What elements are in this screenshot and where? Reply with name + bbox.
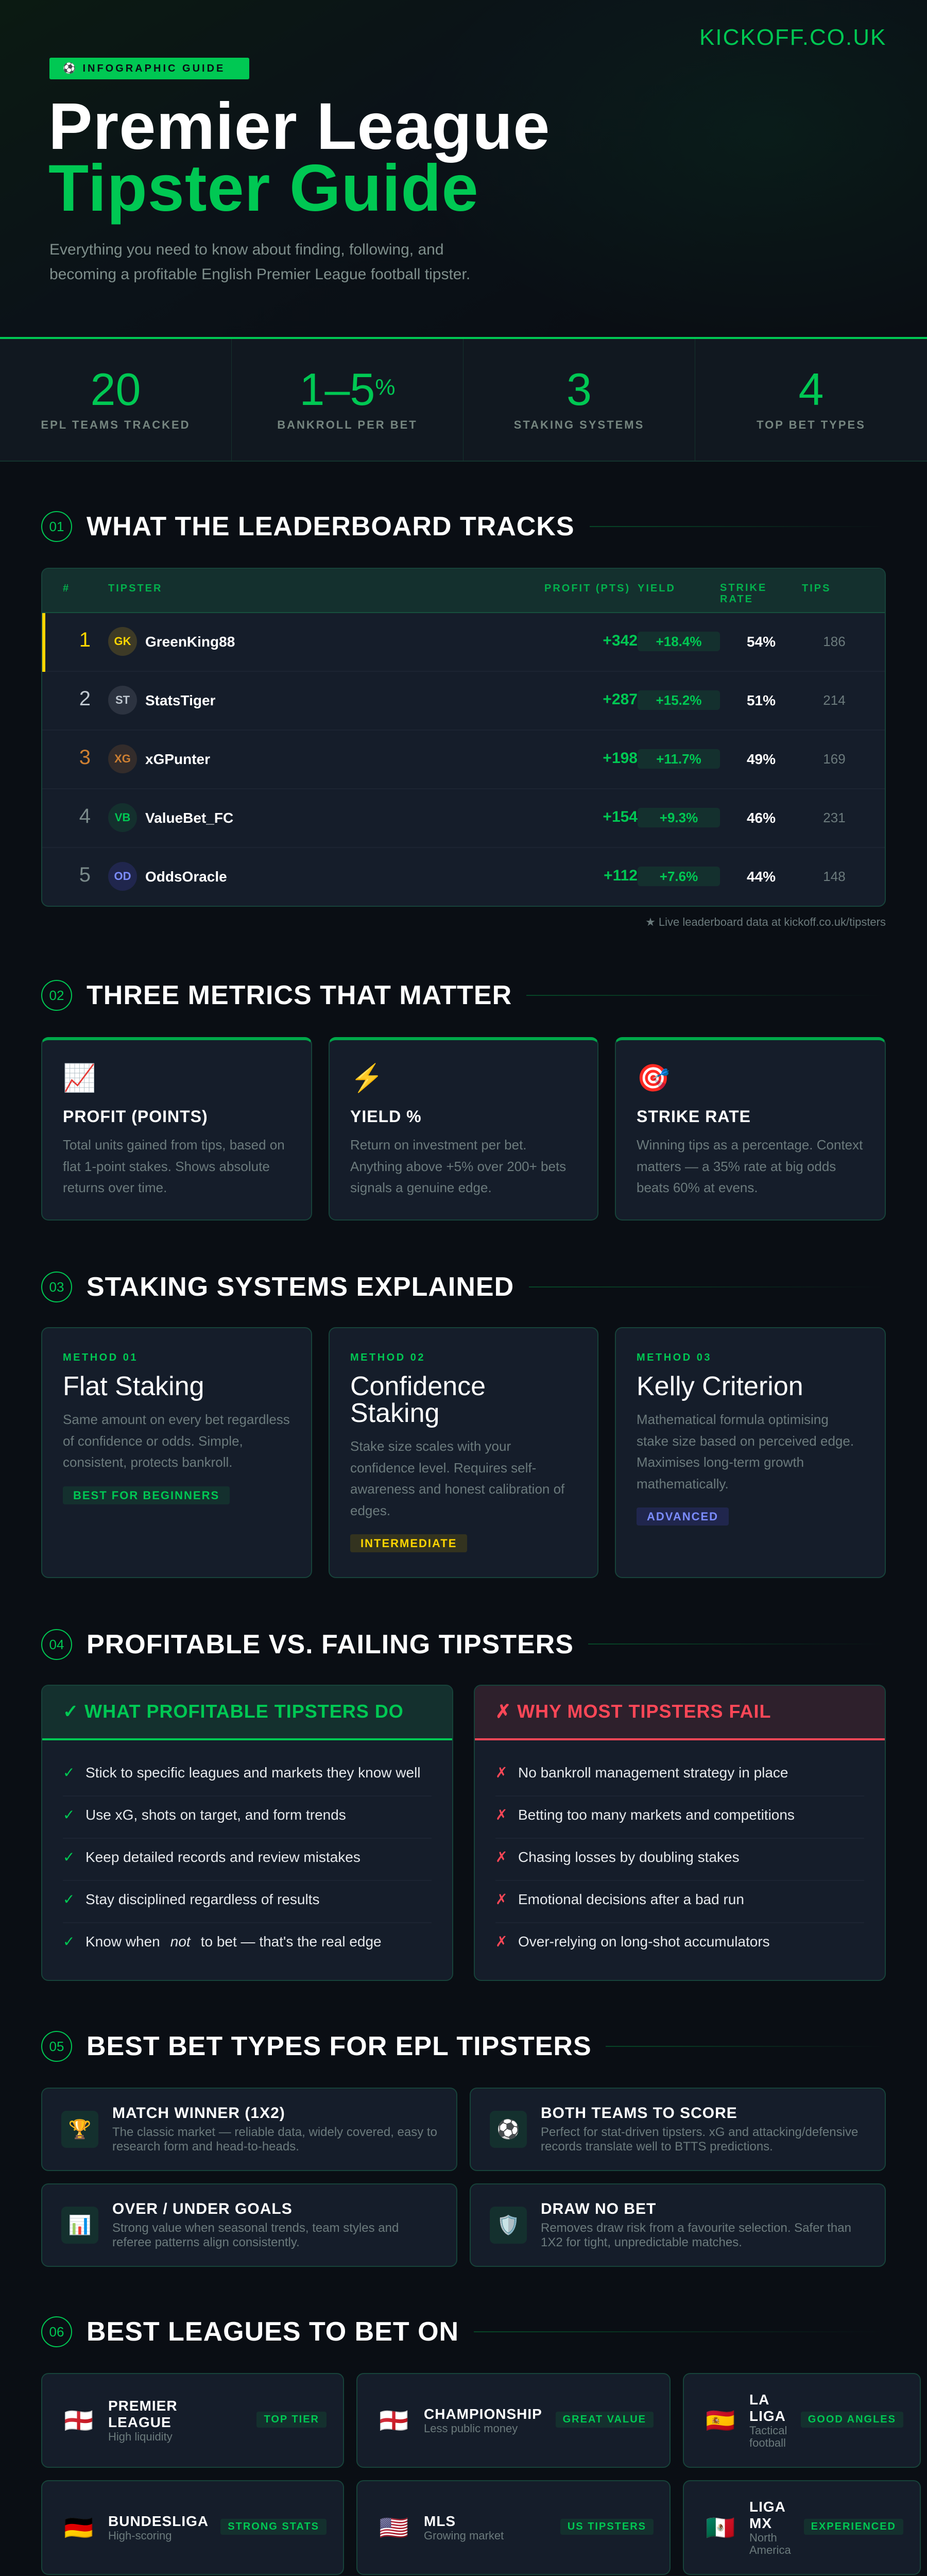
panel heading (42, 1686, 452, 1740)
table header: YIELD (638, 583, 676, 594)
league: premier league: PREMIER (108, 2398, 178, 2414)
item: ✗ (495, 1807, 507, 1823)
item (495, 1881, 864, 1923)
league: la liga: LIGA (749, 2408, 786, 2424)
bet text (541, 2221, 851, 2249)
bet: match winner (41, 2088, 457, 2171)
bet title: BOTH TEAMS TO SCORE (541, 2105, 737, 2122)
bet title: DRAW NO BET (541, 2200, 656, 2217)
stat: staking (464, 339, 695, 461)
row 2: StatsTiger (145, 692, 215, 708)
item (495, 1797, 864, 1839)
metric: profit (41, 1037, 312, 1221)
icon: shield (490, 2207, 527, 2244)
section 02 number: 02 (49, 988, 64, 1003)
item (495, 1839, 864, 1881)
metric text: signals a genuine edge. (350, 1180, 492, 1195)
item: Keep detailed records and review mistakes (85, 1849, 360, 1865)
league: premier league (41, 2373, 344, 2468)
item (63, 1797, 432, 1839)
league: bundesliga (41, 2480, 344, 2575)
section 01 heading: WHAT THE LEADERBOARD TRACKS (87, 512, 575, 541)
stat: bankroll: BANKROLL PER BET (277, 418, 418, 431)
stat: bankroll: 1–5% (300, 364, 395, 415)
row 5 (79, 862, 846, 891)
row 3: +11.7% (656, 751, 701, 767)
item (495, 1754, 864, 1797)
league: bundesliga: STRONG STATS (228, 2521, 319, 2532)
metric text: returns over time. (63, 1180, 167, 1195)
row 3: 169 (823, 751, 846, 767)
icon: trophy: 🏆 (68, 2119, 91, 2140)
bet: draw no bet (470, 2183, 886, 2267)
item: Stick to specific leagues and markets they know well (85, 1765, 421, 1781)
row 3: +198 (603, 750, 638, 767)
section 04 number: 04 (49, 1637, 64, 1652)
subtitle (49, 241, 470, 283)
item: Emotional decisions after a bad run (518, 1891, 744, 1907)
icon: shield: 🛡️ (497, 2214, 520, 2235)
staking: kelly: METHOD 03 (637, 1352, 712, 1363)
table header: TIPS (802, 583, 831, 594)
item: ✓ (63, 1765, 75, 1781)
league: la liga (683, 2373, 921, 2468)
row 5: OddsOracle (145, 869, 227, 885)
staking: confidence: awareness and honest calibration of (350, 1481, 564, 1497)
row 1: 54% (747, 634, 776, 650)
panel: failing (474, 1685, 886, 1981)
row 2: ST (115, 693, 130, 706)
league: la liga: Tactical (749, 2424, 787, 2437)
section 04 number (41, 1629, 72, 1660)
icon: target: 🎯 (637, 1063, 670, 1093)
metric title: PROFIT (POINTS) (63, 1107, 208, 1126)
bet text: Removes draw risk from a favourite selection. Safer than (541, 2221, 851, 2235)
league: championship: GREAT VALUE (563, 2414, 646, 2425)
icon: lightning: ⚡ (350, 1063, 384, 1093)
item: ✗ (495, 1765, 507, 1781)
league: mls (356, 2480, 671, 2575)
item (63, 1754, 432, 1797)
row 5: 5 (79, 863, 91, 886)
league: premier league: High liquidity (108, 2430, 173, 2443)
item: Chasing losses by doubling stakes (518, 1849, 740, 1865)
staking: kelly (615, 1327, 886, 1578)
bet text: research form and head-to-heads. (112, 2140, 299, 2154)
section 04 heading: PROFITABLE VS. FAILING TIPSTERS (87, 1630, 574, 1659)
staking: confidence: confidence level. Requires self- (350, 1460, 536, 1476)
row 1: +18.4% (656, 634, 701, 649)
stat: teams: 20 (91, 364, 141, 415)
row 2 (42, 672, 885, 731)
row 1: GK (114, 635, 131, 648)
bet text (112, 2221, 399, 2249)
item: ✓ (63, 1934, 75, 1950)
table header: STRIKE (720, 582, 767, 594)
bet: btts (470, 2088, 886, 2171)
brand logo: KICKOFF.CO.UK (699, 25, 886, 50)
stat: bet types: 4 (799, 364, 823, 415)
row 1: 186 (823, 634, 846, 649)
league: mls: US TIPSTERS (568, 2521, 646, 2532)
stat: bet types: TOP BET TYPES (757, 418, 866, 431)
staking: flat: Flat Staking (63, 1371, 204, 1401)
league: liga mx: LIGA (749, 2499, 786, 2514)
league: liga mx: MX (749, 2515, 772, 2531)
league: championship: CHAMPIONSHIP (424, 2406, 542, 2422)
item: ✗ (495, 1849, 507, 1865)
icon: chart: 📈 (63, 1063, 96, 1093)
badge: ⚽ INFOGRAPHIC GUIDE (63, 63, 225, 74)
league: la liga: GOOD ANGLES (808, 2414, 896, 2425)
league: la liga: football (749, 2436, 786, 2449)
panel heading: ✓ WHAT PROFITABLE TIPSTERS DO (63, 1701, 404, 1722)
staking: kelly: Mathematical formula optimising (637, 1412, 829, 1427)
section 02 number (41, 980, 72, 1011)
table header: TIPSTER (108, 583, 162, 594)
bet: over under (41, 2183, 457, 2267)
item (63, 1839, 432, 1881)
row 2: +15.2% (656, 692, 701, 708)
row 1: 1 (79, 629, 91, 651)
row 5: +112 (604, 867, 638, 884)
row 3: xGPunter (145, 751, 210, 767)
league: championship: Less public money (424, 2422, 518, 2435)
league: premier league: 🏴󠁧󠁢󠁥󠁮󠁧󠁿 (64, 2407, 93, 2434)
icon: bar chart: 📊 (68, 2214, 91, 2235)
staking: flat: METHOD 01 (63, 1352, 138, 1363)
section 06 number: 06 (49, 2324, 64, 2340)
icon: football: ⚽ (497, 2119, 520, 2140)
league: liga mx: North (749, 2531, 777, 2544)
stats bar (0, 339, 927, 462)
league: bundesliga: 🇩🇪 (64, 2514, 93, 2541)
metric title: STRIKE RATE (637, 1107, 751, 1126)
leaderboard table (41, 568, 886, 907)
title (48, 90, 550, 225)
icon: football (490, 2111, 527, 2148)
league: mls: 🇺🇸 (379, 2514, 408, 2541)
metric: yield (329, 1037, 598, 1221)
row 5: OD (114, 870, 131, 883)
row 4: ValueBet_FC (145, 810, 233, 826)
league: championship (356, 2373, 671, 2468)
staking: confidence: Stake size scales with your (350, 1438, 511, 1454)
bet text: 1X2 for tight, unpredictable matches. (541, 2235, 742, 2249)
section 03 number (41, 1272, 72, 1302)
row 3: 3 (79, 746, 91, 769)
row 4: 46% (747, 810, 776, 826)
row 5: 44% (747, 869, 776, 885)
staking: confidence (329, 1327, 598, 1578)
subtitle: Everything you need to know about finding, following, and (49, 241, 444, 258)
staking: kelly: ADVANCED (647, 1510, 718, 1523)
section 05 number (41, 2031, 72, 2062)
table header: RATE (720, 594, 753, 605)
item: ✓ (63, 1807, 75, 1823)
row 4: VB (115, 811, 130, 824)
row 3: 49% (747, 751, 776, 767)
metric text: flat 1-point stakes. Shows absolute (63, 1159, 270, 1174)
bet text (541, 2125, 858, 2154)
item: ✓ (63, 1891, 75, 1907)
row 2: 2 (79, 687, 91, 710)
staking: flat: of confidence or odds. Simple, (63, 1433, 243, 1449)
row 4: +9.3% (660, 810, 698, 825)
league: premier league: LEAGUE (108, 2414, 171, 2430)
panel heading: ✗ WHY MOST TIPSTERS FAIL (495, 1701, 771, 1722)
metric text: Return on investment per bet. (350, 1137, 527, 1153)
item: Over-relying on long-shot accumulators (518, 1934, 770, 1950)
bet text (112, 2125, 437, 2154)
section 01 number: 01 (49, 519, 64, 534)
row 4 (42, 789, 885, 848)
row 4: +154 (603, 808, 638, 825)
league: liga mx: America (749, 2544, 791, 2556)
bet title: OVER / UNDER GOALS (112, 2200, 293, 2217)
row 5: +7.6% (660, 869, 698, 884)
title: Premier League (48, 90, 550, 163)
panel: profitable (41, 1685, 453, 1981)
icon: bar chart (61, 2207, 98, 2244)
staking: confidence: METHOD 02 (350, 1352, 425, 1363)
panel heading (475, 1686, 885, 1740)
row 3: XG (114, 752, 131, 765)
section 05 heading: BEST BET TYPES FOR EPL TIPSTERS (87, 2031, 592, 2061)
staking: kelly: mathematically. (637, 1476, 729, 1492)
item: to bet — that's the real edge (201, 1934, 382, 1950)
league: la liga: 🇪🇸 (706, 2407, 735, 2434)
row 1: GreenKing88 (145, 634, 235, 650)
staking: confidence: edges. (350, 1503, 390, 1518)
staking: kelly: Kelly Criterion (637, 1371, 803, 1401)
row 2: 214 (823, 692, 846, 708)
metric title: YIELD % (350, 1107, 422, 1126)
item: ✗ (495, 1934, 507, 1950)
staking: kelly: stake size based on perceived edge. (637, 1433, 854, 1449)
item (63, 1881, 432, 1923)
league: la liga: LA (749, 2392, 769, 2407)
section 06 heading: BEST LEAGUES TO BET ON (87, 2317, 459, 2347)
row 4: 4 (79, 805, 91, 827)
row 2: 51% (747, 692, 776, 708)
hero (0, 0, 927, 337)
league: liga mx: 🇲🇽 (706, 2514, 735, 2541)
league: liga mx: EXPERIENCED (811, 2521, 896, 2532)
bet text: Perfect for stat-driven tipsters. xG and attacking/defensive (541, 2125, 858, 2139)
item: Stay disciplined regardless of results (85, 1891, 319, 1907)
metric text: Anything above +5% over 200+ bets (350, 1159, 566, 1174)
metric text (63, 1137, 285, 1195)
table header: PROFIT (PTS) (544, 583, 630, 594)
item: ✓ (63, 1849, 75, 1865)
table footnote: ★ Live leaderboard data at kickoff.co.uk/tipsters (645, 916, 886, 928)
bet text: referee patterns align consistently. (112, 2235, 300, 2249)
badge (49, 58, 249, 79)
section 06 number (41, 2316, 72, 2347)
metric text: Winning tips as a percentage. Context (637, 1137, 863, 1153)
bet text: records translate well to BTTS predictions. (541, 2140, 773, 2154)
bet text: The classic market — reliable data, widely covered, easy to (112, 2125, 437, 2139)
league: premier league: TOP TIER (264, 2414, 319, 2425)
item (63, 1934, 382, 1950)
title: Tipster Guide (48, 151, 479, 225)
metric text (637, 1137, 863, 1195)
league: championship: 🏴󠁧󠁢󠁥󠁮󠁧󠁿 (379, 2407, 408, 2434)
league: mls: Growing market (424, 2529, 504, 2542)
table header: # (63, 583, 70, 594)
staking: confidence: INTERMEDIATE (360, 1537, 457, 1550)
item: No bankroll management strategy in place (518, 1765, 788, 1781)
league: bundesliga: BUNDESLIGA (108, 2513, 209, 2529)
metric text: beats 60% at evens. (637, 1180, 758, 1195)
table header (42, 569, 885, 613)
icon: trophy (61, 2111, 98, 2148)
stat: staking: STAKING SYSTEMS (514, 418, 644, 431)
league: mls: MLS (424, 2513, 456, 2529)
section 02 heading: THREE METRICS THAT MATTER (87, 980, 512, 1010)
bet title: MATCH WINNER (1X2) (112, 2105, 285, 2122)
item: Betting too many markets and competitions (518, 1807, 795, 1823)
hero divider (0, 337, 927, 339)
subtitle: becoming a profitable English Premier League football tipster. (49, 266, 470, 283)
stat: bet types (757, 364, 866, 431)
row 1: +342 (603, 632, 638, 649)
item: Use xG, shots on target, and form trends (85, 1807, 346, 1823)
metric text (350, 1137, 566, 1195)
staking: flat: consistent, protects bankroll. (63, 1454, 233, 1470)
stat: staking: 3 (566, 364, 592, 415)
item: ✗ (495, 1891, 507, 1907)
stat: bankroll (232, 339, 464, 461)
section 03 heading: STAKING SYSTEMS EXPLAINED (87, 1272, 514, 1302)
metric: strike rate (615, 1037, 886, 1221)
staking: confidence: Confidence (350, 1371, 486, 1401)
row 2: +287 (603, 691, 638, 708)
row 3 (42, 731, 885, 789)
league: bundesliga: High-scoring (108, 2529, 172, 2542)
section 03 number: 03 (49, 1279, 64, 1295)
staking: confidence: Staking (350, 1398, 439, 1428)
metric text: Total units gained from tips, based on (63, 1137, 285, 1153)
staking: kelly: Maximises long-term growth (637, 1454, 804, 1470)
staking: flat: BEST FOR BEGINNERS (73, 1489, 219, 1502)
section 01 number (41, 511, 72, 542)
staking: flat: Same amount on every bet regardless (63, 1412, 290, 1427)
stat: teams (0, 339, 232, 461)
staking: flat (41, 1327, 312, 1578)
row 1 (42, 613, 885, 672)
metric text: matters — a 35% rate at big odds (637, 1159, 836, 1174)
league: liga mx (683, 2480, 921, 2575)
bet text: Strong value when seasonal trends, team styles and (112, 2221, 399, 2235)
row 4: 231 (823, 810, 846, 825)
row 5: 148 (823, 869, 846, 884)
item: Know when (85, 1934, 160, 1950)
item: not (170, 1934, 191, 1950)
section 05 number: 05 (49, 2039, 64, 2054)
stat: teams: EPL TEAMS TRACKED (41, 418, 191, 431)
